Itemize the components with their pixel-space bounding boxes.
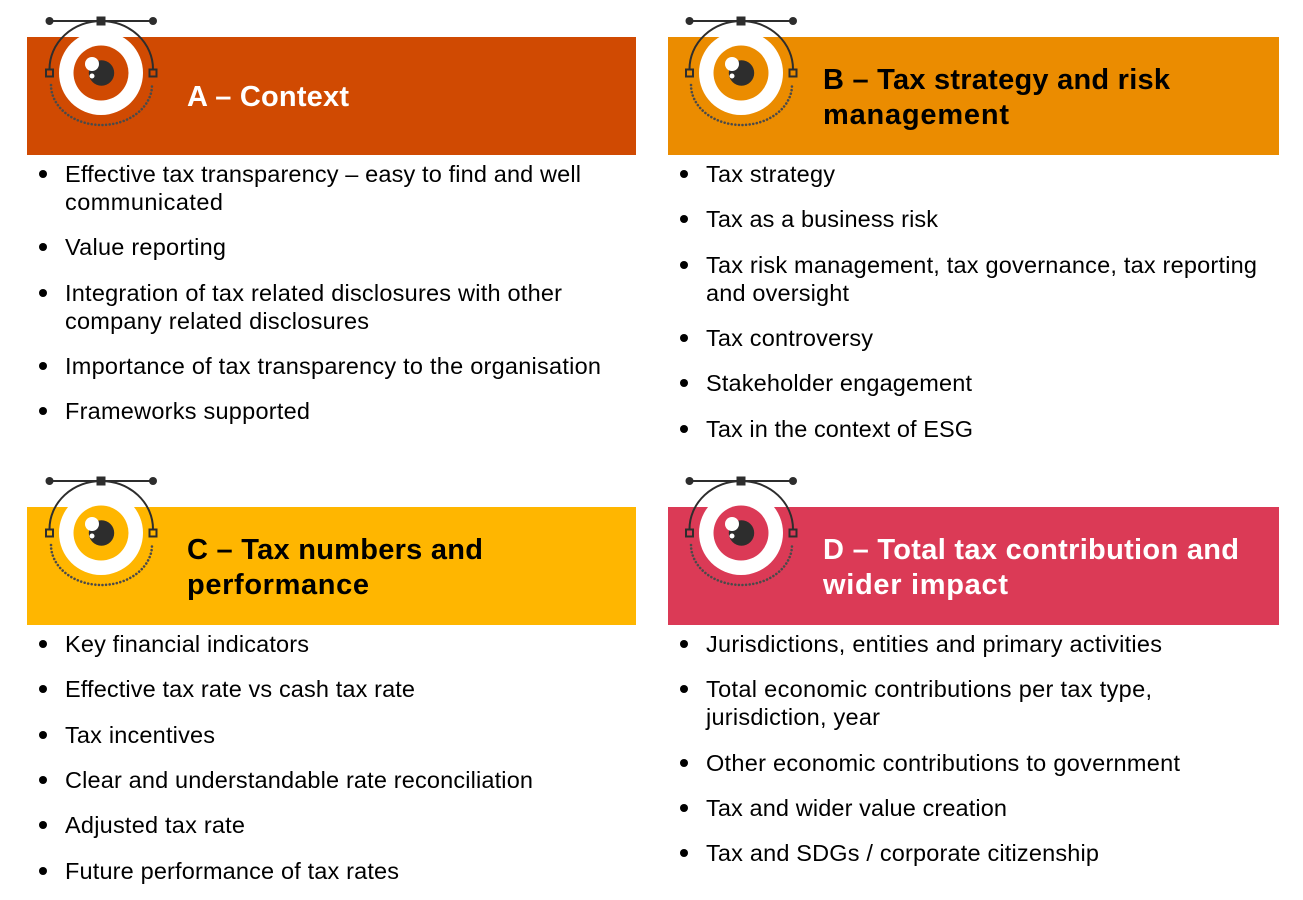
banner C (27, 507, 636, 625)
heading B (823, 64, 1171, 131)
heading D: wider impact (822, 569, 1008, 601)
heading B: management (823, 99, 1009, 131)
bullet list C: Key financial indicators (65, 631, 309, 657)
bullet list B: Tax controversy (706, 325, 873, 351)
panel: B Tax strategy and risk management (668, 16, 1279, 442)
bullet list D: Jurisdictions, entities and primary activities (706, 631, 1162, 657)
banner B (668, 37, 1279, 155)
bullet list A: Frameworks supported (65, 398, 310, 424)
heading C: C – Tax numbers and (187, 534, 483, 566)
panel: D Total tax contribution and wider impact (668, 476, 1279, 866)
icon: eye with bezier handles (686, 16, 797, 125)
heading C: performance (187, 569, 369, 601)
icon: eye with bezier handles (686, 476, 797, 585)
bullet list B: Stakeholder engagement (706, 370, 972, 396)
banner A (27, 37, 636, 155)
bullet list A: Effective tax transparency – easy to find and well (65, 161, 581, 187)
bullet list B (680, 161, 1257, 442)
heading A: A – Context (187, 81, 349, 113)
bullet list A: communicated (65, 189, 223, 215)
bullet list C: Tax incentives (65, 722, 215, 748)
bullet list D: Total economic contributions per tax type, (706, 676, 1152, 702)
heading D (822, 534, 1239, 601)
bullet list B: Tax risk management, tax governance, tax reporting (706, 252, 1257, 278)
bullet list C: Future performance of tax rates (65, 858, 399, 884)
heading C (187, 534, 483, 601)
banner D (668, 507, 1279, 625)
bullet list A: Integration of tax related disclosures with other (65, 280, 562, 306)
bullet list C: Clear and understandable rate reconciliation (65, 767, 533, 793)
bullet list B: and oversight (706, 280, 849, 306)
bullet list D (680, 631, 1180, 866)
heading D: D – Total tax contribution and (823, 534, 1239, 566)
bullet list A (39, 161, 601, 424)
bullet list B: Tax strategy (706, 161, 835, 187)
bullet list C: Effective tax rate vs cash tax rate (65, 676, 415, 702)
icon: eye with bezier handles (46, 16, 157, 125)
bullet list D: jurisdiction, year (705, 704, 880, 730)
heading B: B – Tax strategy and risk (823, 64, 1171, 96)
bullet list C (39, 631, 533, 884)
bullet list D: Tax and wider value creation (706, 795, 1007, 821)
bullet list C: Adjusted tax rate (65, 812, 245, 838)
bullet list A: Value reporting (65, 234, 226, 260)
icon: eye with bezier handles (46, 476, 157, 585)
bullet list B: Tax in the context of ESG (706, 416, 973, 442)
bullet list D: Tax and SDGs / corporate citizenship (706, 840, 1099, 866)
bullet list D: Other economic contributions to government (706, 750, 1180, 776)
panel: C Tax numbers and performance (27, 476, 636, 884)
bullet list B: Tax as a business risk (706, 206, 938, 232)
bullet list A: Importance of tax transparency to the organisation (65, 353, 601, 379)
panel: A Context (27, 16, 636, 424)
bullet list A: company related disclosures (65, 308, 369, 334)
